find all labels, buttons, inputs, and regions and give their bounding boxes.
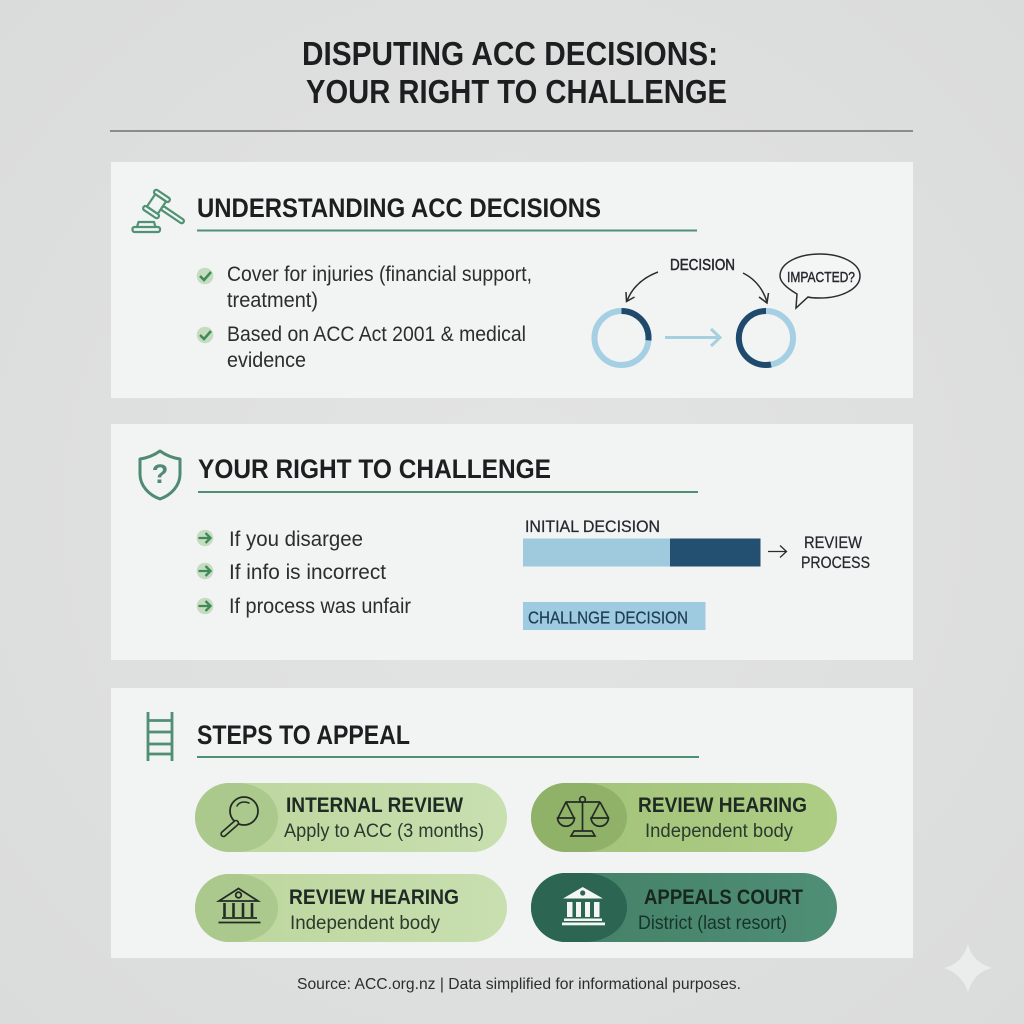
bullet: unfair: If process was unfair <box>229 595 411 618</box>
panel: your right to challenge <box>111 424 913 660</box>
step: appeals court: District (last resort) <box>638 912 787 934</box>
bar: initial decision <box>523 538 760 566</box>
icon: shield: ? <box>152 459 168 489</box>
heading: YOUR RIGHT TO CHALLENGE <box>198 454 551 484</box>
arrow: ring to ring <box>665 329 720 346</box>
step: review hearing, building <box>195 874 507 942</box>
bullet: incorrect: If info is incorrect <box>229 561 386 584</box>
diagram: decision cycle <box>594 254 860 365</box>
bullet text: based on: evidence <box>227 349 306 372</box>
footer source: Source: ACC.org.nz | Data simplified for informational purposes. <box>297 976 741 993</box>
bullet text: cover: Cover for injuries (financial support, <box>227 263 532 286</box>
bullet: disagree: If you disargee <box>229 528 363 551</box>
icon: shield <box>140 451 180 499</box>
arrow: decision to left ring <box>626 272 658 302</box>
step: internal review <box>195 783 507 852</box>
icon: sparkle <box>944 944 992 992</box>
ring: after <box>739 311 793 365</box>
icon: check bullet <box>197 268 213 284</box>
title <box>302 35 727 110</box>
title: YOUR RIGHT TO CHALLENGE <box>306 73 727 110</box>
chart: decision bars <box>523 517 870 630</box>
icon: scales <box>558 797 608 836</box>
step: review hearing, building: Independent body <box>290 912 440 934</box>
bullet text: based on <box>227 323 526 372</box>
label: initial decision: INITIAL DECISION <box>525 517 660 536</box>
icon: ladder <box>148 712 172 761</box>
ring: before <box>594 311 649 365</box>
title: DISPUTING ACC DECISIONS: <box>302 35 718 72</box>
heading: STEPS TO APPEAL <box>197 720 410 750</box>
panel: understanding ACC decisions <box>111 162 913 398</box>
arrow: decision to right ring <box>743 273 768 303</box>
step: review hearing, scales <box>531 783 837 852</box>
label: review process <box>801 533 870 572</box>
icon: magnifier <box>224 797 258 834</box>
arrow: to review process <box>768 546 786 558</box>
panel: steps to appeal <box>111 688 913 958</box>
bar: challenge decision: CHALLNGE DECISION <box>528 608 688 628</box>
step: internal review: INTERNAL REVIEW <box>286 793 464 817</box>
icon: gavel <box>132 189 190 232</box>
heading: UNDERSTANDING ACC DECISIONS <box>197 193 601 223</box>
icon: courthouse white <box>562 887 605 925</box>
bar: challenge decision <box>523 602 706 630</box>
step: internal review: Apply to ACC (3 months) <box>284 820 484 842</box>
bullet text: cover <box>227 263 532 312</box>
step: review hearing, building: REVIEW HEARING <box>289 885 459 909</box>
step: appeals court: APPEALS COURT <box>644 885 803 909</box>
step: appeals court <box>531 873 837 942</box>
step: review hearing, scales: Independent body <box>645 820 793 842</box>
icon: check bullet <box>197 327 213 343</box>
label: review process: REVIEW <box>804 533 862 552</box>
bullet text: cover: treatment) <box>227 289 318 312</box>
icon: courthouse <box>218 888 260 922</box>
speech bubble: impacted: IMPACTED? <box>787 269 855 286</box>
bullet text: based on: Based on ACC Act 2001 & medical <box>227 323 526 346</box>
label: decision: DECISION <box>670 257 735 274</box>
speech bubble: impacted <box>780 254 860 308</box>
step: review hearing, scales: REVIEW HEARING <box>638 793 807 817</box>
label: review process: PROCESS <box>801 553 870 572</box>
